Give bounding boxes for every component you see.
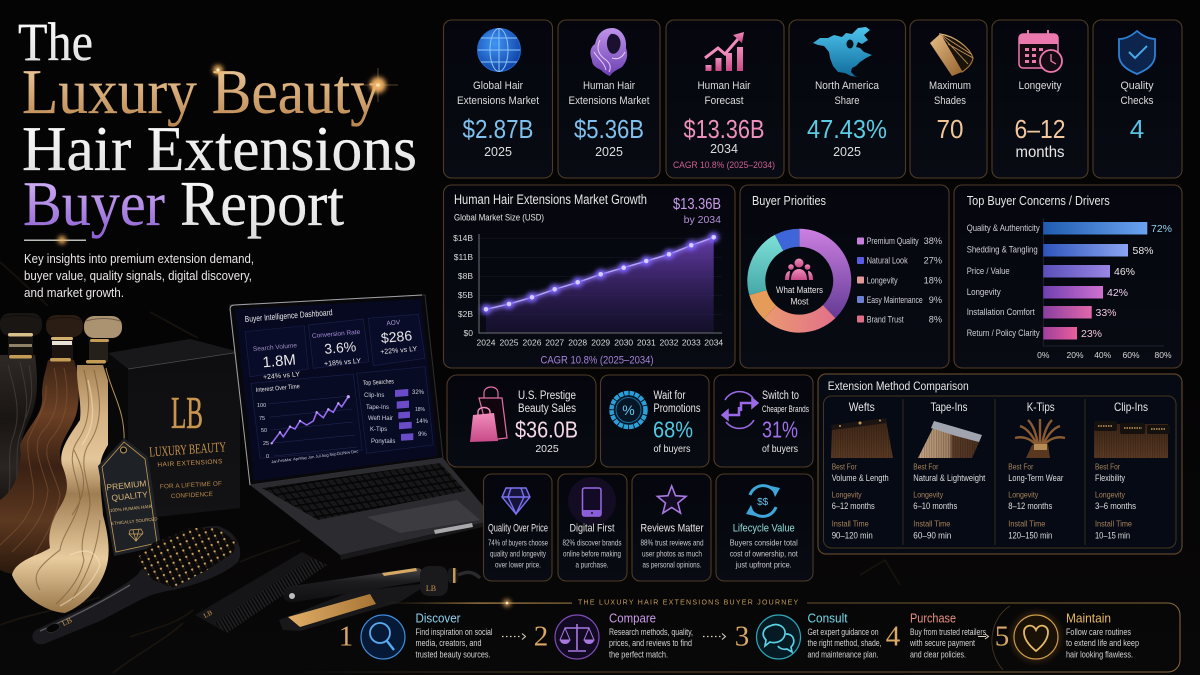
icon: flowing hair [590, 28, 627, 76]
step: compare [534, 610, 693, 660]
panel: north america share: 47.43% [807, 114, 887, 144]
line chart: 2028 [568, 338, 587, 348]
column: wefts: 90–120 min [832, 530, 873, 540]
panel: quality over price: over lower price. [495, 560, 541, 570]
bar chart: 20% [1066, 350, 1084, 360]
bar chart: Shedding & Tangling [967, 244, 1038, 254]
illustration: laptop with buyer intelligence dashboard: $286 [380, 327, 413, 346]
icon: tablet [568, 477, 616, 525]
line chart: $2B [458, 309, 473, 319]
panel: quality checks [1093, 20, 1182, 178]
panel: longevity: months [1016, 144, 1065, 161]
panel: wait for promotions: of buyers [654, 443, 690, 455]
illustration: hair bundles [0, 313, 122, 613]
step: consult: the right method, shade, [808, 638, 882, 648]
column: tape-ins: Install Time [913, 518, 950, 528]
panel: north america share: North America [815, 80, 880, 92]
bar chart: 60% [1122, 350, 1140, 360]
step: maintain [992, 606, 1139, 670]
illustration: laptop with buyer intelligence dashboard: 3.6% [324, 338, 357, 357]
illustration: paddle brush [32, 526, 240, 644]
illustration: laptop with buyer intelligence dashboard: Weft Hair [368, 416, 393, 422]
illustration: laptop with buyer intelligence dashboard: 100 [257, 403, 266, 409]
illustration: laptop with buyer intelligence dashboard: Apr [293, 456, 300, 462]
panel: digital first: online before making [563, 548, 621, 558]
column: clip-ins: 10–15 min [1095, 530, 1130, 540]
illustration: laptop with buyer intelligence dashboard: Ponytails [371, 439, 395, 445]
illustration: comb: LB [202, 608, 214, 620]
bar chart [967, 218, 1172, 360]
step: purchase: Buy from trusted retailers [910, 627, 986, 637]
column: wefts: Longevity [832, 490, 862, 500]
panel: extension method comparison: Extension Method Comparison [828, 379, 969, 393]
illustration: comb [195, 552, 327, 633]
illustration: product box: LB [171, 387, 203, 438]
column: tape-ins: Longevity [913, 490, 944, 500]
illustration: laptop with buyer intelligence dashboard: +22% vs LY [380, 346, 418, 356]
step: purchase: Purchase [910, 610, 956, 626]
bar chart: Price / Value [967, 266, 1010, 276]
bar chart: Quality & Authenticity [967, 223, 1040, 233]
legend: 18% [924, 276, 942, 286]
bar chart: Return / Policy Clarity [967, 328, 1040, 338]
illustration: laptop with buyer intelligence dashboard [230, 295, 495, 560]
line chart: 2032 [660, 338, 679, 348]
panel: maximum shades [910, 20, 987, 178]
illustration: flat iron: LB [426, 584, 436, 593]
column: wefts: Install Time [832, 518, 869, 528]
illustration: laptop with buyer intelligence dashboard: May [299, 455, 307, 461]
line chart: 2026 [523, 338, 542, 348]
subtitle: Key insights into premium extension demand, [24, 251, 254, 266]
bar chart: Longevity [967, 287, 1001, 297]
illustration: laptop with buyer intelligence dashboard: Interest Over Time [256, 383, 300, 394]
bar chart: 46% [1114, 266, 1135, 278]
step: compare: Research methods, quality, [609, 627, 693, 637]
panel: human hair forecast: Human Hair [698, 80, 751, 92]
step: compare: Compare [609, 610, 656, 626]
column: wefts [831, 400, 893, 540]
column: tape-ins [913, 400, 986, 540]
panel: lifecycle value: Lifecycle Value [733, 522, 795, 534]
illustration: laptop with buyer intelligence dashboard: Top Searches [363, 378, 394, 387]
panel: reviews matter: Reviews Matter [640, 522, 704, 534]
panel: global hair extensions market: Extensions Market [457, 95, 540, 107]
panel: digital first: Digital First [570, 522, 614, 534]
panel: human hair forecast: $13.36B [684, 114, 764, 144]
icon: recycling dollars [746, 486, 780, 516]
panel: quality over price: Quality Over Price [488, 522, 548, 534]
image: weft swatch [831, 418, 893, 458]
icon: scales [555, 615, 599, 659]
illustration: laptop with buyer intelligence dashboard: 14% [416, 419, 429, 425]
line chart: $0 [464, 328, 473, 338]
illustration: hang tag [98, 368, 161, 556]
column: k-tips: 8–12 months [1008, 501, 1053, 511]
panel: market growth line chart: Global Market Size (USD) [454, 212, 544, 224]
panel: digital first [558, 474, 627, 581]
donut chart [747, 229, 851, 333]
arrow [703, 634, 726, 640]
panel: lifecycle value: cost of ownership, not [730, 548, 798, 558]
step: maintain: Follow care routines [1066, 627, 1131, 637]
legend: 27% [924, 256, 942, 266]
illustration: laptop with buyer intelligence dashboard: Dec [351, 449, 359, 454]
panel: switch to cheaper brands: Switch to [762, 390, 799, 402]
panel: U.S. prestige beauty sales: U.S. Prestige [518, 390, 576, 402]
column: wefts: 6–12 months [832, 501, 875, 511]
step: purchase: and clear policies. [910, 650, 966, 660]
icon: star [657, 486, 686, 513]
step: compare: prices, and reviews to find [609, 638, 692, 648]
panel: longevity: 6–12 [1014, 114, 1066, 144]
arrow [502, 634, 526, 640]
column: tape-ins: 60–90 min [913, 530, 951, 540]
legend: Brand Trust [867, 314, 904, 324]
panel: U.S. prestige beauty sales: 2025 [535, 443, 559, 455]
illustration: laptop with buyer intelligence dashboard: Conversion Rate [312, 329, 361, 340]
legend: Longevity [867, 276, 898, 286]
panel: switch to cheaper brands: 31% [762, 416, 798, 442]
illustration: laptop with buyer intelligence dashboard: Clip-Ins [364, 393, 384, 399]
title: Report [180, 169, 344, 239]
panel: global hair extensions market [444, 20, 552, 178]
legend [857, 236, 942, 324]
panel: market growth line chart [444, 185, 735, 368]
column: k-tips: Best For [1008, 462, 1033, 472]
panel: buyer journey [295, 600, 1180, 672]
illustration: laptop with buyer intelligence dashboard: 0 [266, 454, 269, 460]
line chart: $5B [458, 290, 473, 300]
panel: U.S. prestige beauty sales: $36.0B [515, 416, 578, 442]
illustration: flat iron [279, 566, 480, 631]
line chart: $8B [458, 271, 473, 281]
step: consult [735, 610, 882, 660]
panel: switch to cheaper brands: Cheaper Brands [762, 404, 809, 414]
panel: human hair forecast: Forecast [704, 95, 744, 107]
step: consult: Get expert guidance on [808, 627, 879, 637]
icon: chat bubbles [756, 615, 800, 659]
panel: human hair extensions market [558, 20, 660, 178]
panel: longevity: Longevity [1018, 80, 1062, 92]
arrow [978, 634, 988, 639]
panel: top buyer concerns and drivers: Top Buyer Concerns / Drivers [967, 193, 1110, 208]
column: clip-ins: Install Time [1095, 518, 1132, 528]
icon: globe [478, 28, 520, 72]
panel: human hair extensions market: Extensions Market [568, 95, 650, 107]
column: k-tips: Long-Term Wear [1008, 473, 1063, 483]
illustration: laptop with buyer intelligence dashboard: Buyer Intelligence Dashboard [244, 307, 333, 324]
line chart: $11B [454, 252, 473, 262]
illustration: laptop with buyer intelligence dashboard: Sep [329, 451, 338, 457]
legend: Premium Quality [867, 236, 919, 246]
icon: calendar and clock [1019, 30, 1062, 72]
panel: wait for promotions: 68% [653, 416, 693, 442]
bar chart: 33% [1096, 307, 1117, 319]
panel: global hair extensions market: $2.87B [462, 114, 534, 144]
panel: reviews matter [632, 474, 711, 581]
step: maintain: Maintain [1066, 610, 1111, 626]
step: discover: 1 [339, 620, 353, 652]
step: maintain: hair looking flawless. [1066, 650, 1133, 660]
column: k-tips: Longevity [1008, 490, 1039, 500]
illustration: laptop with buyer intelligence dashboard: 9% [418, 432, 427, 438]
column: clip-ins: 3–6 months [1095, 501, 1136, 511]
icon: diamond [502, 488, 530, 514]
panel: human hair forecast: CAGR 10.8% (2025–2034) [673, 160, 775, 171]
title: Hair Extensions [22, 114, 417, 184]
panel: lifecycle value: just upfront price. [735, 560, 792, 570]
illustration: product box: HAIR EXTENSIONS [157, 458, 223, 469]
column: clip-ins [1094, 400, 1170, 540]
line chart: 2033 [682, 338, 701, 348]
illustration: laptop with buyer intelligence dashboard: +18% vs LY [324, 358, 362, 368]
line chart [453, 232, 723, 348]
panel: wait for promotions: Wait for [654, 390, 686, 402]
legend: 8% [929, 314, 942, 324]
illustration: hang tag: ETHICALLY SOURCED [111, 516, 158, 526]
legend: Easy Maintenance [867, 295, 923, 305]
icon: heart [1010, 611, 1062, 663]
panel: lifecycle value [716, 474, 813, 581]
step: compare: 2 [534, 620, 548, 652]
bar chart: 23% [1081, 328, 1102, 340]
step: purchase: 4 [886, 620, 901, 652]
illustration: paddle brush: LB [60, 615, 73, 628]
line chart: 2024 [477, 338, 496, 348]
title: The [18, 12, 93, 72]
legend: Natural Look [867, 256, 908, 266]
step: discover: trusted beauty sources. [416, 650, 490, 660]
panel: human hair extensions market: 2025 [595, 145, 623, 159]
panel: maximum shades: Maximum [929, 80, 971, 92]
illustration: laptop with buyer intelligence dashboard: Jun [308, 454, 315, 460]
illustration: laptop with buyer intelligence dashboard: 32% [412, 390, 425, 396]
column: clip-ins: Flexibility [1095, 473, 1125, 483]
illustration: product box: LUXURY BEAUTY [149, 440, 227, 461]
column: k-tips [1008, 400, 1065, 540]
bar chart: Installation Comfort [967, 307, 1035, 317]
bar chart: 72% [1151, 223, 1172, 235]
panel: buyer journey: THE LUXURY HAIR EXTENSIONS BUYER JOURNEY [578, 600, 800, 606]
panel: wait for promotions: Promotions [654, 403, 701, 415]
column: wefts: Best For [832, 462, 857, 472]
icon: percent badge: % [622, 402, 635, 418]
icon: people group [785, 258, 813, 280]
icon: shield with check [1119, 31, 1155, 74]
panel: quality checks: Quality [1120, 80, 1154, 92]
illustration: laptop with buyer intelligence dashboard: Oct [336, 450, 344, 456]
panel: reviews matter: 88% trust reviews and [640, 538, 704, 548]
line chart: 2025 [500, 338, 519, 348]
panel: human hair extensions market: $5.36B [574, 114, 644, 144]
step: discover: Find inspiration on social [416, 627, 493, 637]
step: consult: 3 [735, 620, 749, 652]
illustration: laptop with buyer intelligence dashboard: 1.8M [262, 352, 297, 371]
illustration: laptop with buyer intelligence dashboard: Nov [343, 450, 351, 455]
panel: switch to cheaper brands: of buyers [762, 443, 798, 455]
bar chart: 0% [1037, 350, 1050, 360]
panel: quality over price [484, 474, 552, 581]
panel: extension method comparison [818, 374, 1182, 554]
panel: market growth line chart: Human Hair Extensions Market Growth [454, 192, 647, 207]
icon: north america map [813, 27, 872, 77]
panel: lifecycle value: $$ [757, 497, 769, 508]
panel: buyer priorities: Buyer Priorities [752, 194, 826, 208]
panel: digital first: a purchase. [576, 560, 608, 570]
column: k-tips: Install Time [1008, 518, 1045, 528]
line chart: 2029 [591, 338, 610, 348]
panel: quality over price: 74% of buyers choose [488, 538, 548, 548]
title: Buyer [23, 169, 165, 239]
icon: shade swatch fan [930, 34, 973, 76]
panel: quality checks: Checks [1120, 95, 1154, 107]
panel: maximum shades: 70 [936, 114, 964, 144]
column: clip-ins: Clip-Ins [1114, 400, 1148, 414]
illustration: hang tag: 100% HUMAN HAIR [110, 504, 153, 513]
subtitle: buyer value, quality signals, digital discovery, [24, 268, 252, 283]
illustration: hang tag: QUALITY [111, 489, 149, 503]
illustration: laptop with buyer intelligence dashboard: 18% [415, 407, 426, 413]
panel: top buyer concerns and drivers [954, 185, 1182, 368]
panel: maximum shades: Shades [934, 95, 966, 107]
panel: north america share: Share [834, 95, 860, 107]
panel: global hair extensions market: Global Hair [473, 80, 523, 92]
panel: global hair extensions market: 2025 [484, 145, 512, 159]
panel: buyer priorities: Most [790, 296, 809, 306]
legend: 9% [929, 295, 942, 305]
panel: U.S. prestige beauty sales [447, 375, 596, 467]
bar chart: 58% [1132, 245, 1154, 257]
panel: reviews matter: as personal opinions. [642, 560, 702, 570]
panel: market growth line chart: CAGR 10.8% (2025–2034) [540, 354, 654, 366]
panel: reviews matter: user photos as much [642, 548, 702, 558]
step: maintain: 5 [995, 620, 1009, 652]
panel: north america share [789, 20, 906, 178]
line chart: 2034 [704, 338, 723, 348]
illustration: laptop with buyer intelligence dashboard: +24% vs LY [263, 371, 301, 381]
panel: human hair forecast: 2034 [710, 142, 738, 156]
illustration: laptop with buyer intelligence dashboard: 75 [259, 416, 265, 422]
line chart: 2030 [614, 338, 633, 348]
illustration: laptop with buyer intelligence dashboard: Mar [285, 457, 293, 463]
column: k-tips: 120–150 min [1008, 530, 1052, 540]
panel: U.S. prestige beauty sales: Beauty Sales [518, 403, 576, 415]
step: discover: Discover [416, 610, 461, 626]
column: tape-ins: 6–10 months [913, 501, 958, 511]
column: wefts: Wefts [849, 400, 875, 414]
column: tape-ins: Natural & Lightweight [913, 473, 986, 483]
illustration: product box [108, 339, 240, 520]
bar chart: 42% [1107, 287, 1128, 299]
illustration: hang tag: PREMIUM [106, 478, 147, 492]
image: k-tip bundle [1015, 419, 1065, 458]
step: discover [339, 610, 493, 660]
panel: longevity [992, 20, 1088, 178]
illustration: laptop with buyer intelligence dashboard: Feb [278, 458, 286, 463]
bar chart: 80% [1154, 350, 1172, 360]
step: consult: Consult [808, 610, 848, 626]
panel: human hair forecast [666, 20, 784, 178]
column: k-tips: K-Tips [1027, 400, 1055, 414]
panel: switch to cheaper brands [714, 375, 813, 467]
illustration: laptop with buyer intelligence dashboard: Tape-Ins [366, 405, 389, 411]
column: wefts: Volume & Length [832, 473, 889, 483]
subtitle [24, 251, 254, 300]
illustration: laptop with buyer intelligence dashboard: K-Tips [370, 427, 387, 433]
step: purchase: with secure payment [909, 638, 975, 648]
illustration: product box: FOR A LIFETIME OF [160, 480, 222, 491]
panel: human hair extensions market: Human Hair [583, 80, 635, 92]
column: clip-ins: Longevity [1095, 490, 1126, 500]
icon: rising bar chart [705, 32, 744, 71]
line chart: $14B [453, 233, 473, 243]
panel: market growth line chart: $13.36B [673, 196, 721, 213]
panel: market growth line chart: by 2034 [684, 214, 721, 226]
panel: buyer priorities: What Matters [776, 285, 823, 295]
illustration: laptop with buyer intelligence dashboard: Jul [315, 453, 321, 459]
line chart: 2031 [637, 338, 656, 348]
column: tape-ins: Best For [913, 462, 938, 472]
panel: digital first: 82% discover brands [562, 538, 622, 548]
bar chart: 40% [1094, 350, 1112, 360]
icon: magnifier [361, 615, 405, 659]
icon: switch arrows [722, 392, 758, 428]
subtitle: and market growth. [24, 285, 124, 300]
illustration: laptop with buyer intelligence dashboard: 50 [261, 428, 267, 434]
step: purchase [886, 610, 986, 660]
panel: quality checks: 4 [1130, 114, 1144, 144]
illustration: laptop with buyer intelligence dashboard: AOV [386, 319, 401, 327]
column: tape-ins: Tape-Ins [930, 400, 968, 414]
illustration: laptop with buyer intelligence dashboard: 25 [263, 441, 269, 447]
panel: buyer priorities [740, 185, 949, 368]
panel: quality over price: quality and longevity [490, 548, 547, 558]
step: discover: media, creators, and [416, 638, 482, 648]
icon: shopping bags [470, 387, 507, 442]
step: compare: the perfect match. [609, 650, 668, 660]
column: clip-ins: Best For [1095, 462, 1120, 472]
legend: 38% [924, 236, 942, 246]
image: tape-in swatch [918, 421, 982, 458]
illustration: laptop with buyer intelligence dashboard: Aug [321, 452, 329, 458]
panel: north america share: 2025 [833, 145, 861, 159]
illustration: product box: CONFIDENCE [171, 491, 213, 500]
title: Luxury Beauty [22, 57, 380, 127]
title [18, 12, 417, 239]
illustration: laptop with buyer intelligence dashboard: Search Volume [253, 342, 298, 353]
panel: wait for promotions [600, 375, 709, 467]
illustration: laptop with buyer intelligence dashboard: Jan [271, 458, 278, 464]
step: maintain: to extend life and keep [1066, 638, 1139, 648]
line chart: 2027 [545, 338, 564, 348]
step: consult: and maintenance plan. [808, 650, 878, 660]
panel: lifecycle value: Buyers consider total [730, 538, 798, 548]
image: clip-in wefts [1094, 421, 1170, 458]
